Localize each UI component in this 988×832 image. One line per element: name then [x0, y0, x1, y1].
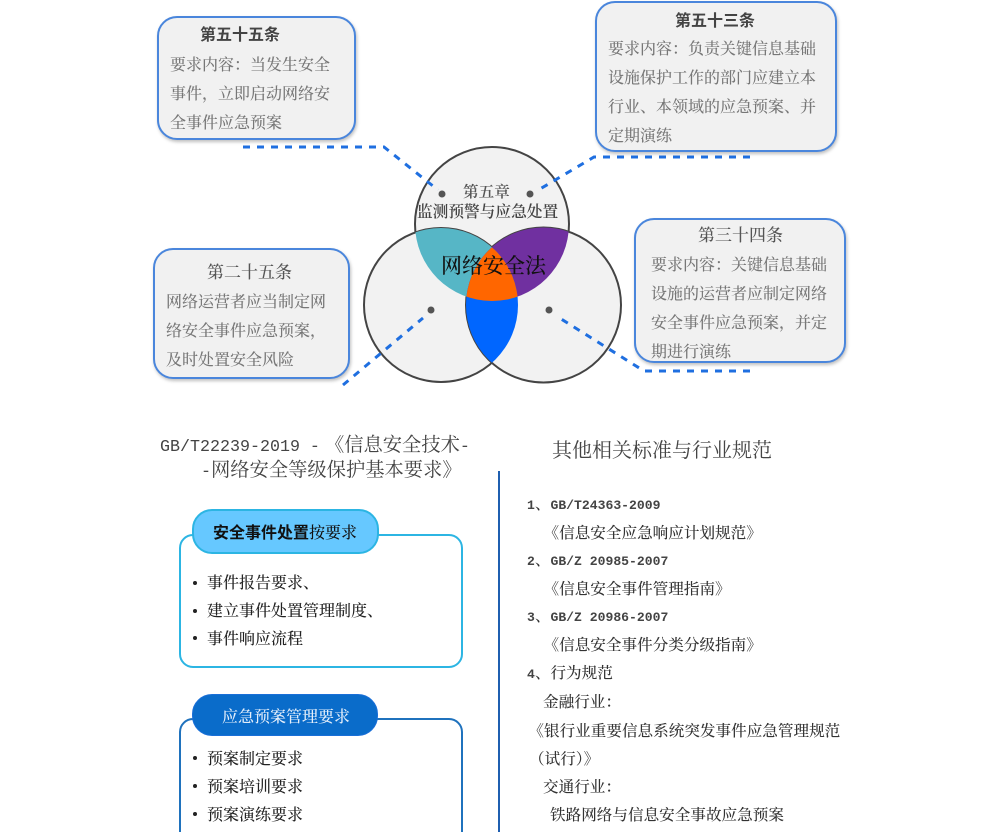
body text: [651, 252, 827, 362]
body text: [170, 52, 330, 133]
left heading: -网络安全等级保护基本要求》: [201, 454, 462, 482]
pill: emergency plan: [192, 694, 378, 736]
right heading: 其他相关标准与行业规范: [552, 434, 772, 463]
venn label: chapter title: 监测预警与应急处置: [417, 200, 558, 222]
body text: 事件，立即启动网络安: [170, 81, 330, 104]
left heading: GB/T22239-2019 - 《信息安全技术-: [160, 429, 470, 457]
standards list: [527, 492, 840, 825]
heading: 第五十三条: [675, 13, 755, 30]
venn diagram with connectors: [243, 146, 750, 386]
list: 预案制定要求: [207, 746, 303, 769]
standards list: 交通行业：: [543, 775, 621, 797]
pill: emergency plan: 应急预案管理要求: [222, 704, 350, 727]
body text: 定期演练: [608, 123, 672, 146]
list: [193, 570, 383, 649]
overlap: purple: [466, 228, 568, 296]
list: [193, 746, 303, 825]
overlap: blue: [466, 247, 518, 363]
panel: emergency plan: [179, 718, 463, 832]
heading: 第三十四条: [698, 221, 783, 246]
venn label: center: 网络安全法: [441, 250, 546, 280]
standards list: （试行）》: [529, 747, 599, 769]
dashed connectors: [243, 147, 750, 385]
standards list: 《信息安全事件管理指南》: [544, 577, 731, 599]
list: 预案培训要求: [207, 774, 303, 797]
list: 建立事件处置管理制度、: [207, 598, 383, 621]
overlap: orange: [466, 247, 518, 301]
overlap: teal: [416, 228, 492, 296]
body text: 期进行演练: [651, 339, 731, 362]
body text: 设施保护工作的部门应建立本: [608, 65, 816, 88]
standards list: 1、GB/T24363-2009: [527, 492, 660, 514]
standards list: 金融行业：: [543, 690, 621, 712]
card: article 55: [157, 16, 356, 140]
standards list: 2、GB/Z 20985-2007: [527, 548, 668, 570]
body text: 行业、本领域的应急预案、并: [608, 94, 816, 117]
pill: incident handling: 安全事件处置按要求: [213, 520, 357, 543]
card: article 34: [634, 218, 846, 363]
panel: incident handling: [179, 534, 463, 668]
standards list: 3、GB/Z 20986-2007: [527, 604, 668, 626]
body text: 及时处置安全风险: [166, 347, 294, 370]
standards list: 《银行业重要信息系统突发事件应急管理规范: [528, 719, 840, 741]
body text: 安全事件应急预案，并定: [651, 310, 827, 333]
body text: 全事件应急预案: [170, 110, 282, 133]
heading: 第二十五条: [207, 258, 292, 283]
connector dots: [428, 190, 552, 314]
body text: [166, 289, 326, 370]
body text: 要求内容：关键信息基础: [651, 252, 827, 275]
list: 预案演练要求: [207, 802, 303, 825]
body text: 要求内容：当发生安全: [170, 52, 330, 75]
vertical divider: [498, 471, 500, 832]
list: 事件响应流程: [207, 626, 303, 649]
body text: 络安全事件应急预案，: [166, 318, 326, 341]
standards list: 《信息安全应急响应计划规范》: [544, 521, 762, 543]
standards list: 《信息安全事件分类分级指南》: [544, 633, 762, 655]
body text: 要求内容：负责关键信息基础: [608, 36, 816, 59]
standards list: 铁路网络与信息安全事故应急预案: [550, 803, 784, 825]
list: 事件报告要求、: [207, 570, 319, 593]
body text: [608, 36, 816, 146]
card: article 25: [153, 248, 350, 379]
body text: 网络运营者应当制定网: [166, 289, 326, 312]
standards list: 4、行为规范: [527, 661, 613, 683]
left heading: [160, 429, 470, 482]
card: article 53: [595, 1, 837, 152]
venn label: chapter: 第五章: [463, 180, 510, 202]
body text: 设施的运营者应制定网络: [651, 281, 827, 304]
circles: [364, 147, 621, 382]
pill: incident handling: [192, 509, 379, 554]
heading: 第五十五条: [200, 27, 280, 44]
